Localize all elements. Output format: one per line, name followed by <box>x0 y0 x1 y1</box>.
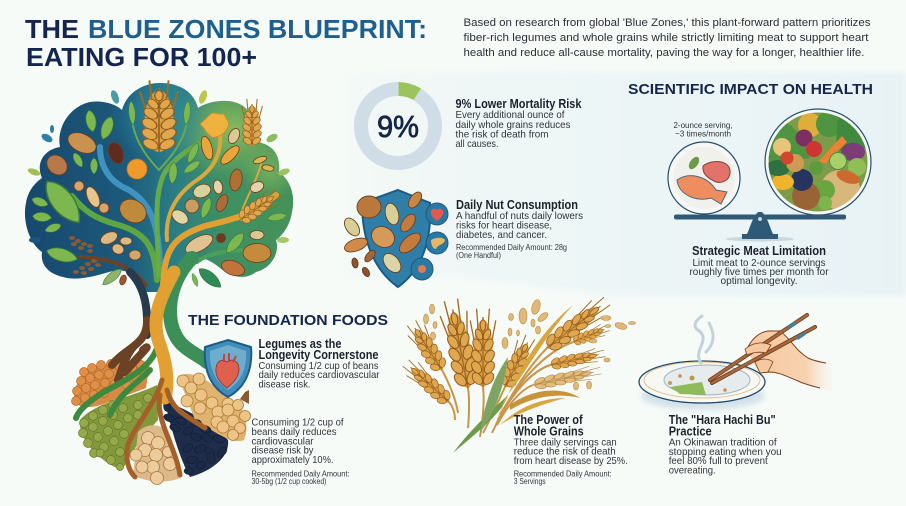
text: bean recommendation: 30-5bg (1/2 cup cooked) <box>252 477 327 486</box>
title <box>25 14 427 72</box>
text: daily nut consumption: Recommended Daily Amount: 28g <box>456 243 567 252</box>
text: daily nut consumption: A handful of nuts daily lowers <box>456 211 583 222</box>
text: the hara hachi bu practice: overeating. <box>669 466 716 476</box>
intro paragraph: fiber-rich legumes and whole grains while strictly limiting meat to support heart <box>464 32 869 44</box>
text: daily nut consumption: (One Handful) <box>456 251 501 260</box>
illustration: wheat sheaf <box>400 293 636 453</box>
title: EATING FOR 100+ <box>26 42 257 72</box>
text: the hara hachi bu practice <box>669 413 782 476</box>
text: 9% lower mortality risk <box>456 97 582 150</box>
donut chart: 9%: 9% <box>377 109 419 144</box>
title: THE <box>25 14 79 44</box>
text: the power of whole grains: from heart disease by 25%. <box>514 456 628 467</box>
text: legumes as the longevity cornerstone: disease risk. <box>258 380 310 390</box>
text: the power of whole grains: reduce the risk of death <box>514 446 616 458</box>
crown wheat <box>139 80 284 228</box>
text: bean recommendation: cardiovascular <box>252 436 314 448</box>
chopsticks <box>710 315 815 383</box>
text: daily nut consumption: Daily Nut Consumption <box>456 198 578 212</box>
plate label: ~3 times/month <box>675 130 731 138</box>
text: the power of whole grains: Recommended Daily Amount: <box>514 470 612 478</box>
text: strategic meat limitation: Limit meat to 2-ounce servings <box>692 258 826 269</box>
big plate with plant foods <box>765 109 871 215</box>
gripping fingers <box>745 343 773 373</box>
intro paragraph: Based on research from global 'Blue Zones,' this plant-forward pattern prioritizes <box>464 17 871 29</box>
heading: scientific impact on health: SCIENTIFIC IMPACT ON HEALTH <box>628 81 873 98</box>
illustration: balance scale with plates <box>668 109 871 242</box>
text: 9% lower mortality risk: 9% Lower Mortality Risk <box>456 97 582 111</box>
steam <box>695 316 713 363</box>
text: strategic meat limitation: Strategic Meat Limitation <box>692 244 826 258</box>
heading: the foundation foods: THE FOUNDATION FOODS <box>188 312 388 329</box>
intro paragraph: health and reduce all-cause mortality, paving the way for a longer, healthier life. <box>464 47 864 59</box>
small plate with meat <box>668 142 740 214</box>
tree trunk and roots <box>76 258 207 477</box>
crown nuts and fruit <box>43 113 274 286</box>
text: the power of whole grains: The Power of <box>514 413 583 427</box>
text: the power of whole grains: 3 Servings <box>514 477 546 486</box>
text: bean recommendation: beans daily reduces <box>252 427 336 438</box>
text: strategic meat limitation: roughly five times per month for <box>690 267 829 278</box>
donut chart: 9% <box>361 82 435 163</box>
text: the hara hachi bu practice: Practice <box>669 424 712 438</box>
text: legumes as the longevity cornerstone <box>258 337 380 390</box>
text: bean recommendation: approximately 10%. <box>252 455 334 466</box>
title: BLUE ZONES BLUEPRINT: <box>88 14 427 44</box>
scale beam <box>674 214 846 220</box>
text: legumes as the longevity cornerstone: Legumes as the <box>258 337 342 351</box>
text: legumes as the longevity cornerstone: Consuming 1/2 cup of beans <box>258 361 378 372</box>
text: legumes as the longevity cornerstone: Longevity Cornerstone <box>258 348 379 362</box>
text: the hara hachi bu practice: feel 80% full to prevent <box>669 456 768 467</box>
plate label: 2-ounce serving, <box>674 121 732 130</box>
text: strategic meat limitation: optimal longevity. <box>720 276 798 287</box>
crown leaves <box>31 101 287 291</box>
text: 9% lower mortality risk: daily whole grains reduces <box>456 120 570 131</box>
root bean clusters <box>72 360 250 484</box>
text: bean recommendation: Consuming 1/2 cup of <box>252 418 344 428</box>
tree branches <box>72 108 276 285</box>
plate label <box>674 121 732 138</box>
text: the power of whole grains: Three daily servings can <box>514 438 617 448</box>
scale base <box>726 212 794 242</box>
tree crown <box>24 83 294 292</box>
text: 9% lower mortality risk: Every additional ounce of <box>456 110 565 121</box>
plate shadow <box>641 382 765 410</box>
text: bean recommendation: Recommended Daily Amount: <box>252 470 350 478</box>
wheat ears <box>400 293 613 409</box>
text: the hara hachi bu practice: stopping eating when you <box>669 447 782 458</box>
text: the hara hachi bu practice: The "Hara Hachi Bu" <box>669 413 776 427</box>
illustration: plate and chopsticks <box>639 315 832 410</box>
text: 9% lower mortality risk: the risk of death from <box>456 130 548 140</box>
text: strategic meat limitation <box>690 244 829 287</box>
text: the power of whole grains <box>514 413 628 486</box>
illustration: longevity tree <box>20 70 300 484</box>
text: daily nut consumption: risks for heart disease, <box>456 220 552 232</box>
text: the hara hachi bu practice: An Okinawan tradition of <box>669 438 777 448</box>
plate <box>639 361 765 403</box>
hand <box>747 331 832 391</box>
icon: heart shield <box>205 340 251 397</box>
text: bean recommendation <box>252 418 350 486</box>
panel: scientific impact backdrop <box>345 72 906 296</box>
intro paragraph <box>464 17 871 59</box>
wheat stems <box>442 342 573 437</box>
text: legumes as the longevity cornerstone: daily reduces cardiovascular <box>258 370 380 381</box>
text: bean recommendation: disease risk by <box>252 446 314 456</box>
wheat leaves <box>453 305 580 453</box>
loose grains <box>424 299 636 390</box>
text: the power of whole grains: Whole Grains <box>514 424 584 438</box>
icon: nuts on shield <box>341 190 448 287</box>
floating leaves around crown <box>27 89 291 243</box>
text: daily nut consumption: diabetes, and cancer. <box>456 230 547 241</box>
text: 9% lower mortality risk: all causes. <box>456 139 498 150</box>
text: daily nut consumption <box>456 198 583 260</box>
